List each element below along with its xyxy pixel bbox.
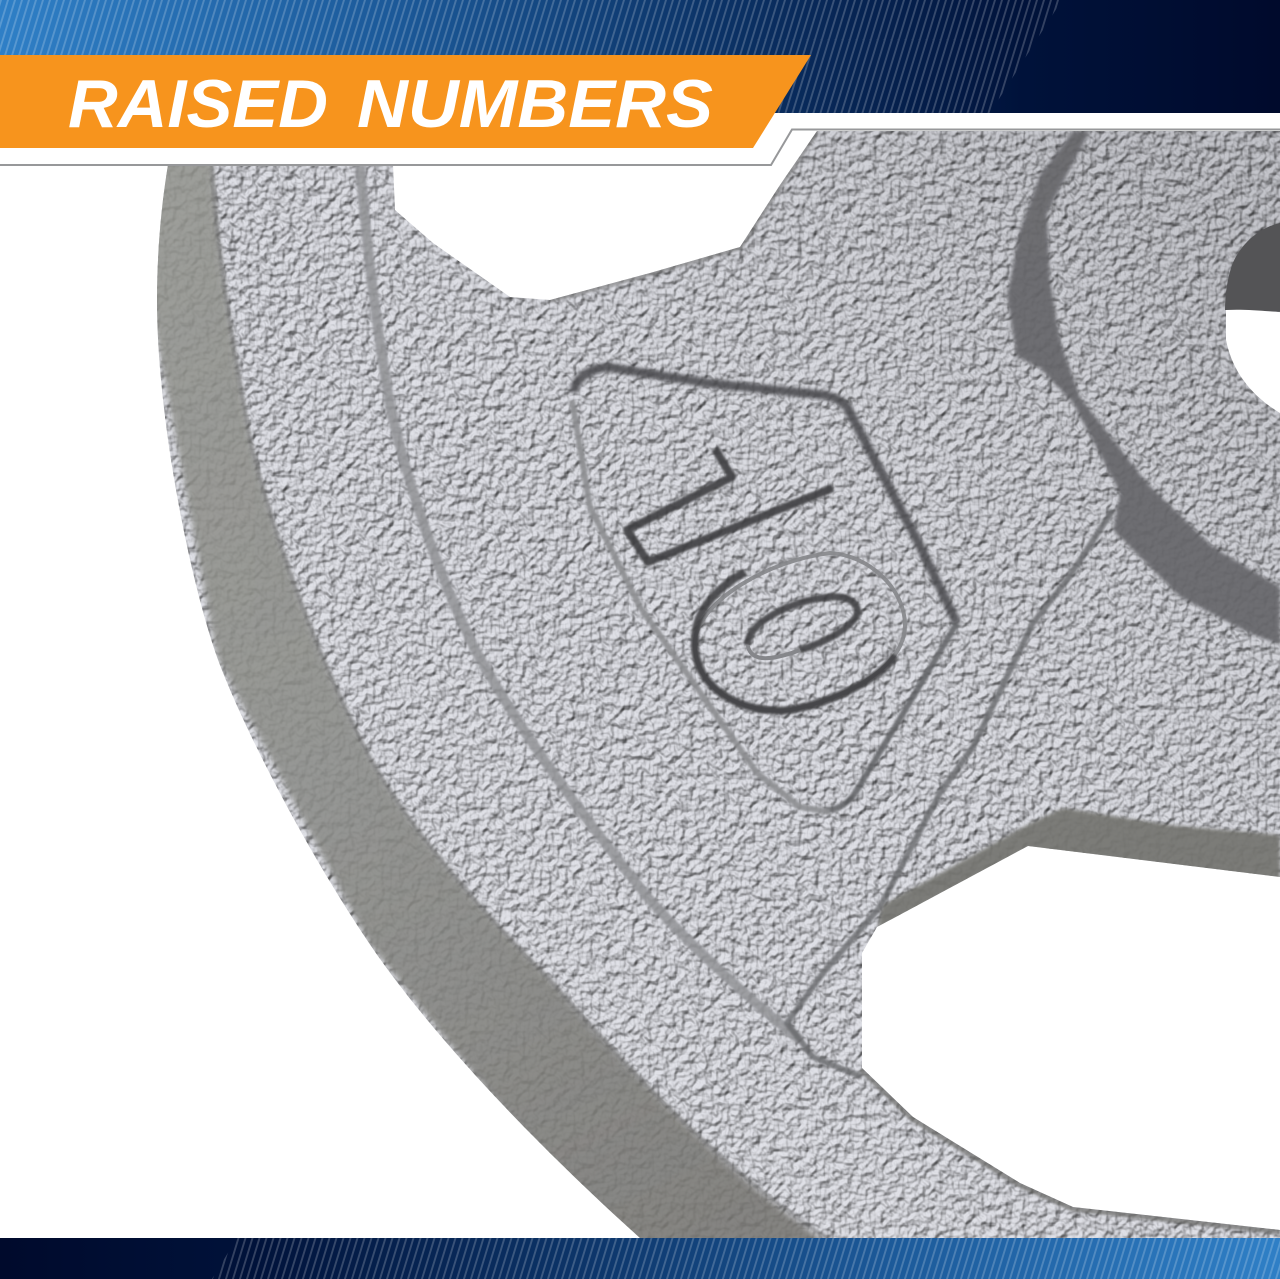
hub hole	[1225, 223, 1280, 420]
raised digit one	[627, 449, 833, 562]
badge right lower edge	[825, 623, 957, 810]
badge light lower edge	[572, 400, 830, 812]
orange title banner	[0, 55, 811, 148]
number badge	[572, 367, 957, 812]
weight plate photo	[150, 125, 1280, 1245]
inner ridge	[360, 165, 800, 1040]
top header band with diagonal stripes	[0, 0, 1280, 113]
bottom band with diagonal stripes	[0, 1238, 1280, 1279]
badge dark upper edge	[574, 367, 957, 623]
window edge shade	[862, 1068, 1280, 1230]
title: NUMBERS	[357, 66, 713, 142]
outer rim side	[150, 160, 830, 1245]
white header ledge	[0, 113, 1280, 164]
spoke crease	[787, 510, 1113, 1077]
title: RAISED	[68, 66, 328, 142]
plate base texture	[150, 125, 1280, 1245]
spoke lower shadow	[877, 808, 1280, 930]
raised digit zero	[695, 553, 905, 711]
upper window edge shade	[550, 131, 817, 300]
rim crease	[212, 165, 830, 1240]
plate tone shading	[150, 125, 1280, 1245]
ledge outline	[0, 130, 1280, 165]
hub shadow bevel	[1007, 131, 1280, 645]
